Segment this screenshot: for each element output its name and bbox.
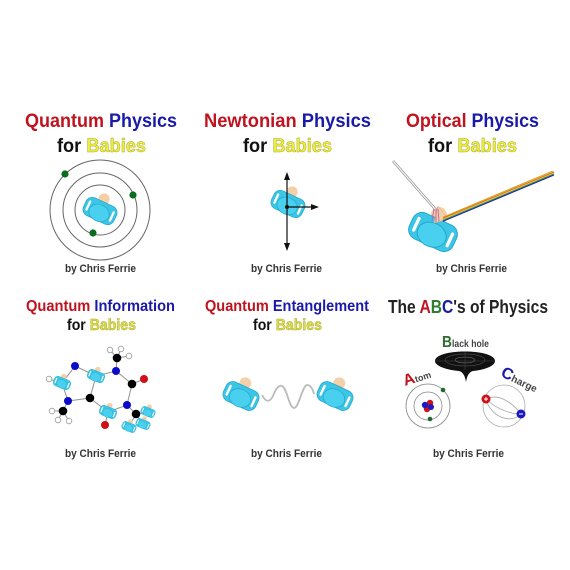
label: Atom: Atom bbox=[401, 365, 433, 390]
title: Optical Physics: Optical Physics bbox=[406, 111, 539, 132]
author: by Chris Ferrie bbox=[436, 263, 507, 275]
author: by Chris Ferrie bbox=[433, 448, 504, 460]
title: Newtonian Physics: Newtonian Physics bbox=[204, 111, 371, 132]
icon: baby with force arrows bbox=[268, 172, 319, 251]
subtitle: for Babies: for Babies bbox=[253, 317, 322, 334]
icon: baby molecule bbox=[46, 346, 158, 434]
subtitle: for Babies: for Babies bbox=[243, 136, 332, 157]
panel: Quantum Physics for Babies bbox=[25, 111, 177, 275]
icon: atom bbox=[406, 384, 450, 428]
title: Quantum Physics: Quantum Physics bbox=[25, 111, 177, 132]
icon: baby atom bbox=[50, 160, 150, 260]
author: by Chris Ferrie bbox=[251, 448, 322, 460]
subtitle: for Babies: for Babies bbox=[57, 136, 146, 157]
icon: baby prism with rainbow bbox=[393, 161, 554, 256]
title: Quantum Information: Quantum Information bbox=[26, 298, 175, 315]
subtitle: for Babies: for Babies bbox=[428, 136, 517, 157]
author: by Chris Ferrie bbox=[251, 263, 322, 275]
panel: Quantum Information for Babies bbox=[26, 298, 175, 460]
icon: black hole bbox=[435, 352, 495, 382]
label: Black hole: Black hole bbox=[442, 334, 489, 351]
icon: entangled babies bbox=[220, 371, 359, 414]
author: by Chris Ferrie bbox=[65, 263, 136, 275]
title: The ABC's of Physics: The ABC's of Physics bbox=[388, 297, 548, 317]
icon: charge field lines bbox=[482, 385, 526, 427]
subtitle: for Babies: for Babies bbox=[67, 317, 136, 334]
author: by Chris Ferrie bbox=[65, 448, 136, 460]
panel: Optical Physics for Babies bbox=[393, 111, 554, 275]
panel: The ABC's of Physics bbox=[388, 297, 548, 460]
label: Charge: Charge bbox=[498, 364, 541, 396]
title: Quantum Entanglement: Quantum Entanglement bbox=[205, 298, 369, 315]
panel: Newtonian Physics for Babies bbox=[204, 111, 371, 275]
panel: Quantum Entanglement for Babies bbox=[205, 298, 369, 460]
